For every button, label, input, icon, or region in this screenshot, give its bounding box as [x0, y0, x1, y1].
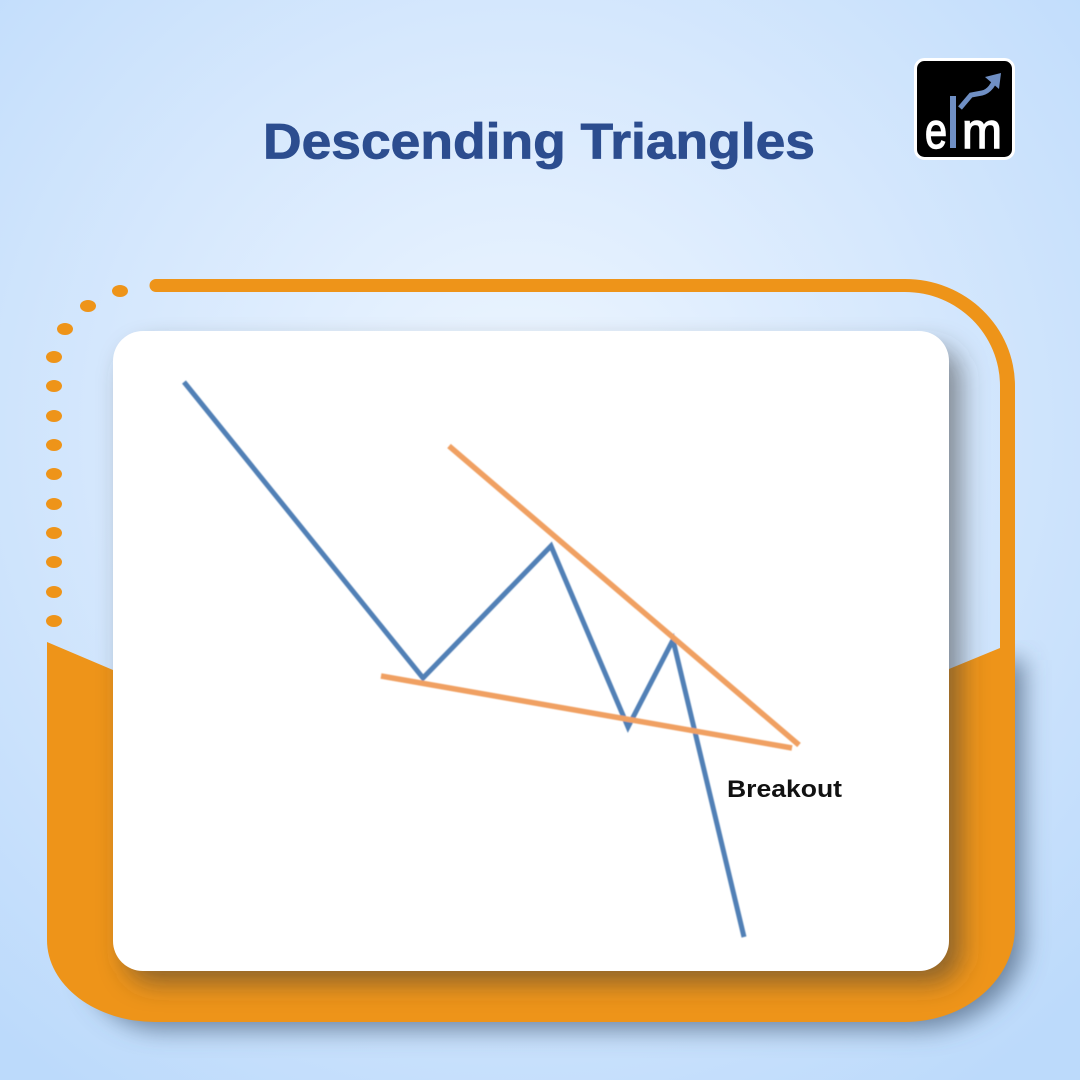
- dotted arc: [46, 285, 128, 627]
- logo: elm: e: [925, 103, 947, 159]
- panel: chart card: [113, 331, 949, 971]
- chart: descending triangle: [184, 382, 799, 937]
- lower trendline: [381, 676, 792, 748]
- breakout label: Breakout: [727, 776, 842, 803]
- orange frame shadow: [85, 660, 1024, 1030]
- price line: [184, 382, 744, 937]
- upper trendline: [449, 446, 799, 745]
- logo: elm: m: [962, 103, 1002, 159]
- card shadow: [125, 347, 961, 983]
- title: Descending Triangles: [263, 114, 815, 170]
- orange frame: [47, 279, 1015, 1022]
- logo: elm: [916, 60, 1014, 159]
